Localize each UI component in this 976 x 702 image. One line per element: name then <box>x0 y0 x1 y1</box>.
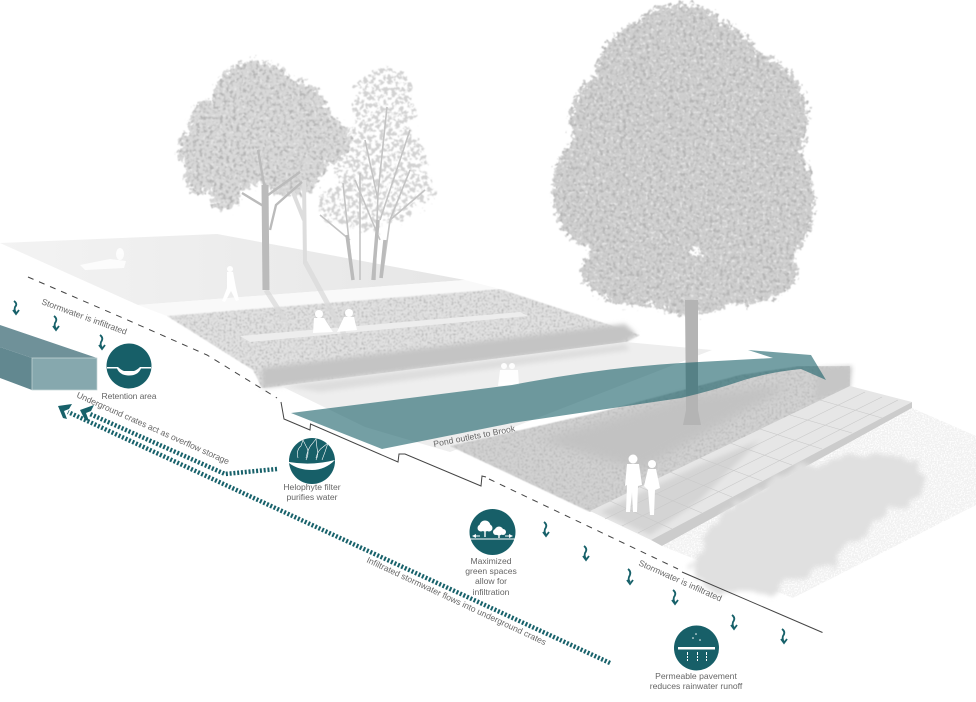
shadows of trees on ground <box>266 262 350 345</box>
top lawn <box>0 234 465 305</box>
trunks and branches <box>242 107 425 290</box>
label: permeable pavement: Permeable pavement <box>655 671 737 681</box>
label: underground crates overflow: Underground crates act as overflow storage <box>75 390 231 466</box>
infiltration labels <box>40 296 724 604</box>
pond water <box>281 342 712 452</box>
label: stormwater infiltrated right: Stormwater is infiltrated <box>637 558 724 604</box>
road surface <box>662 408 976 598</box>
label: green spaces: Maximized <box>470 556 512 566</box>
label: green spaces <box>465 556 517 597</box>
infiltration arrows <box>13 301 787 643</box>
label: helophyte filter: Helophyte filter <box>283 482 341 492</box>
large tree crown <box>552 4 814 315</box>
label: green spaces: allow for <box>475 576 507 586</box>
label: permeable pavement: reduces rainwater runoff <box>650 681 743 691</box>
label: helophyte filter <box>283 482 341 502</box>
label: stormwater infiltrated left: Stormwater is infiltrated <box>40 296 129 337</box>
permeable pavement <box>590 386 912 546</box>
label: green spaces: infiltration <box>473 587 510 597</box>
crown: slim tree <box>317 67 434 231</box>
couple at pond <box>498 363 519 386</box>
section line <box>28 277 822 632</box>
crate front face <box>32 358 97 390</box>
reflection on pond <box>285 344 630 392</box>
people silhouettes <box>80 248 660 515</box>
label: helophyte filter: purifies water <box>286 492 338 502</box>
tree group: left trees <box>178 61 434 290</box>
dotted flow: overflow storage <box>80 405 277 474</box>
icon: retention area <box>106 344 152 388</box>
planted wetland terraces <box>167 289 640 388</box>
label: infiltrated stormwater flow: Infiltrated stormwater flows into underground crates <box>365 555 548 647</box>
teal outlet arrow <box>291 350 826 449</box>
crate top face <box>0 325 97 358</box>
dotted flow: infiltrated stormwater <box>58 404 610 663</box>
large tree trunk <box>683 300 701 425</box>
crown: broad-leaved tree <box>178 61 349 210</box>
path along lawn <box>138 280 500 316</box>
person lying on lawn <box>80 248 126 270</box>
underground crate <box>0 325 97 390</box>
label: green spaces: green spaces <box>465 566 517 576</box>
tree shadow on road <box>674 429 925 621</box>
label: pond outlets: Pond outlets to Brook <box>432 423 517 449</box>
label: permeable pavement <box>650 671 743 691</box>
tree: large foreground tree <box>552 4 814 425</box>
crate side face <box>0 347 32 390</box>
planted bank <box>450 366 852 512</box>
icon: green spaces <box>470 509 516 555</box>
person walking <box>222 266 239 302</box>
icon: helophyte filter <box>289 438 335 484</box>
couple on pavement <box>625 454 660 515</box>
label: retention area: Retention area <box>102 391 157 401</box>
icon: permeable pavement <box>674 626 719 670</box>
people sitting <box>313 309 357 333</box>
